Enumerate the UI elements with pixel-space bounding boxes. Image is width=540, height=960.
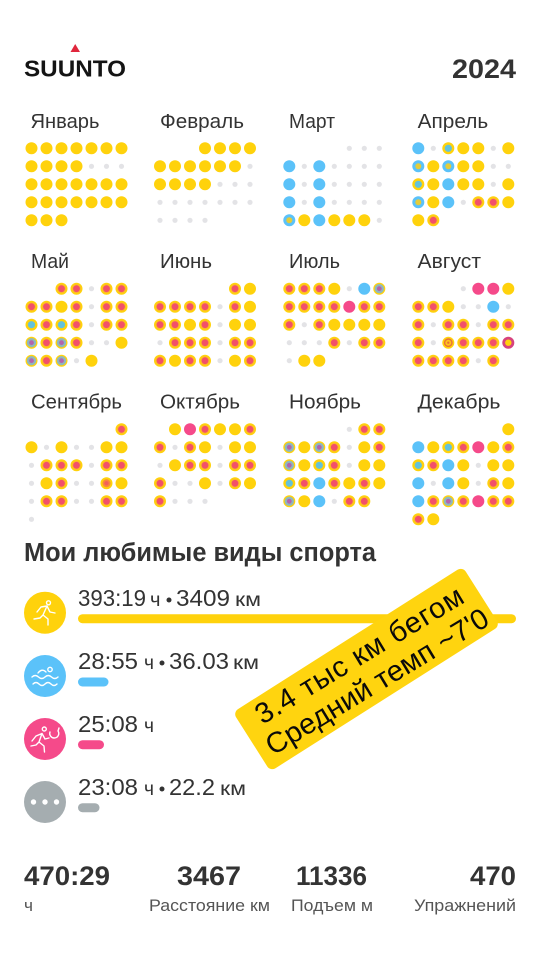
running stats: км (235, 590, 261, 611)
callout: running distance and pace: 3.4 тыс км бегом (250, 580, 470, 731)
summary stat: distance: 3467 (177, 861, 241, 891)
triathlon bar (78, 740, 104, 749)
sport row: other (24, 774, 246, 823)
icon: three dots (24, 781, 66, 823)
swimming stats: 36.03 (169, 648, 229, 674)
month: Апрель: Апрель (418, 111, 488, 133)
month: Октябрь: Октябрь (160, 392, 240, 414)
icon: multisport runner (24, 718, 66, 760)
month: Апрель (412, 111, 514, 226)
month: Сентябрь: Сентябрь (31, 392, 122, 414)
month: Ноябрь: Ноябрь (289, 392, 361, 414)
summary stat: hours: ч (24, 897, 33, 915)
logo: Suunto: SUUNTO (24, 56, 126, 82)
month: Октябрь (154, 392, 256, 507)
summary stat: workouts: Упражнений (414, 897, 516, 915)
month: Февраль: Февраль (160, 111, 244, 133)
month: Март (283, 111, 382, 226)
month: Август (412, 251, 514, 367)
other stats: 23:08 (78, 774, 138, 800)
other stats: 22.2 (169, 774, 215, 800)
year: 2024 (452, 54, 516, 84)
month: Январь (26, 111, 128, 226)
month: Май (26, 251, 128, 367)
month: Июнь: Июнь (160, 251, 212, 273)
sport row: swimming (24, 648, 259, 697)
other bar (78, 803, 100, 812)
swimming stats (78, 648, 259, 674)
callout: running distance and pace (233, 567, 500, 772)
month: Сентябрь (26, 392, 128, 522)
icon: runner (24, 592, 66, 634)
sport row: running (24, 585, 516, 634)
running stats (78, 585, 261, 611)
month: Август: Август (418, 251, 481, 273)
swimming stats: ч (144, 653, 154, 674)
summary stat: ascent (291, 861, 373, 915)
summary stat: distance: Расстояние км (149, 897, 270, 915)
month: Июль (283, 251, 385, 367)
swimming stats: км (233, 653, 259, 674)
summary stat: ascent: Подъем м (291, 897, 373, 915)
summary stat: hours (24, 861, 110, 915)
month: Май: Май (31, 251, 69, 273)
running stats: 3409 (176, 585, 230, 611)
swimming bar (78, 678, 108, 686)
callout: running distance and pace: Средний темп ~7'0 (260, 603, 495, 762)
running stats: 393:19 (78, 585, 146, 611)
sport row: triathlon (24, 711, 154, 760)
month: Февраль (154, 111, 256, 223)
other stats: км (220, 779, 246, 800)
triathlon stats: ч (144, 716, 154, 737)
summary stat: distance (149, 861, 270, 915)
summary stat: workouts: 470 (470, 861, 516, 891)
triathlon stats: 25:08 (78, 711, 138, 737)
month: Декабрь (412, 392, 514, 525)
logo: Suunto (24, 44, 126, 82)
month: Июнь (154, 251, 256, 367)
swimming stats: 28:55 (78, 648, 138, 674)
month: Декабрь: Декабрь (418, 392, 500, 414)
summary stat: ascent: 11336 (296, 861, 367, 891)
month: Июль: Июль (289, 251, 340, 273)
summary stat: workouts (414, 861, 516, 915)
month: Март: Март (289, 111, 335, 133)
month: Ноябрь (283, 392, 385, 507)
icon: swimmer (24, 655, 66, 697)
running stats: ч (150, 590, 160, 611)
summary stat: hours: 470:29 (24, 861, 110, 891)
heading: favourite sports: Мои любимые виды спорта (24, 539, 377, 567)
month: Январь: Январь (30, 111, 100, 133)
running bar (78, 614, 516, 623)
other stats: ч (144, 779, 154, 800)
other stats (78, 774, 246, 800)
